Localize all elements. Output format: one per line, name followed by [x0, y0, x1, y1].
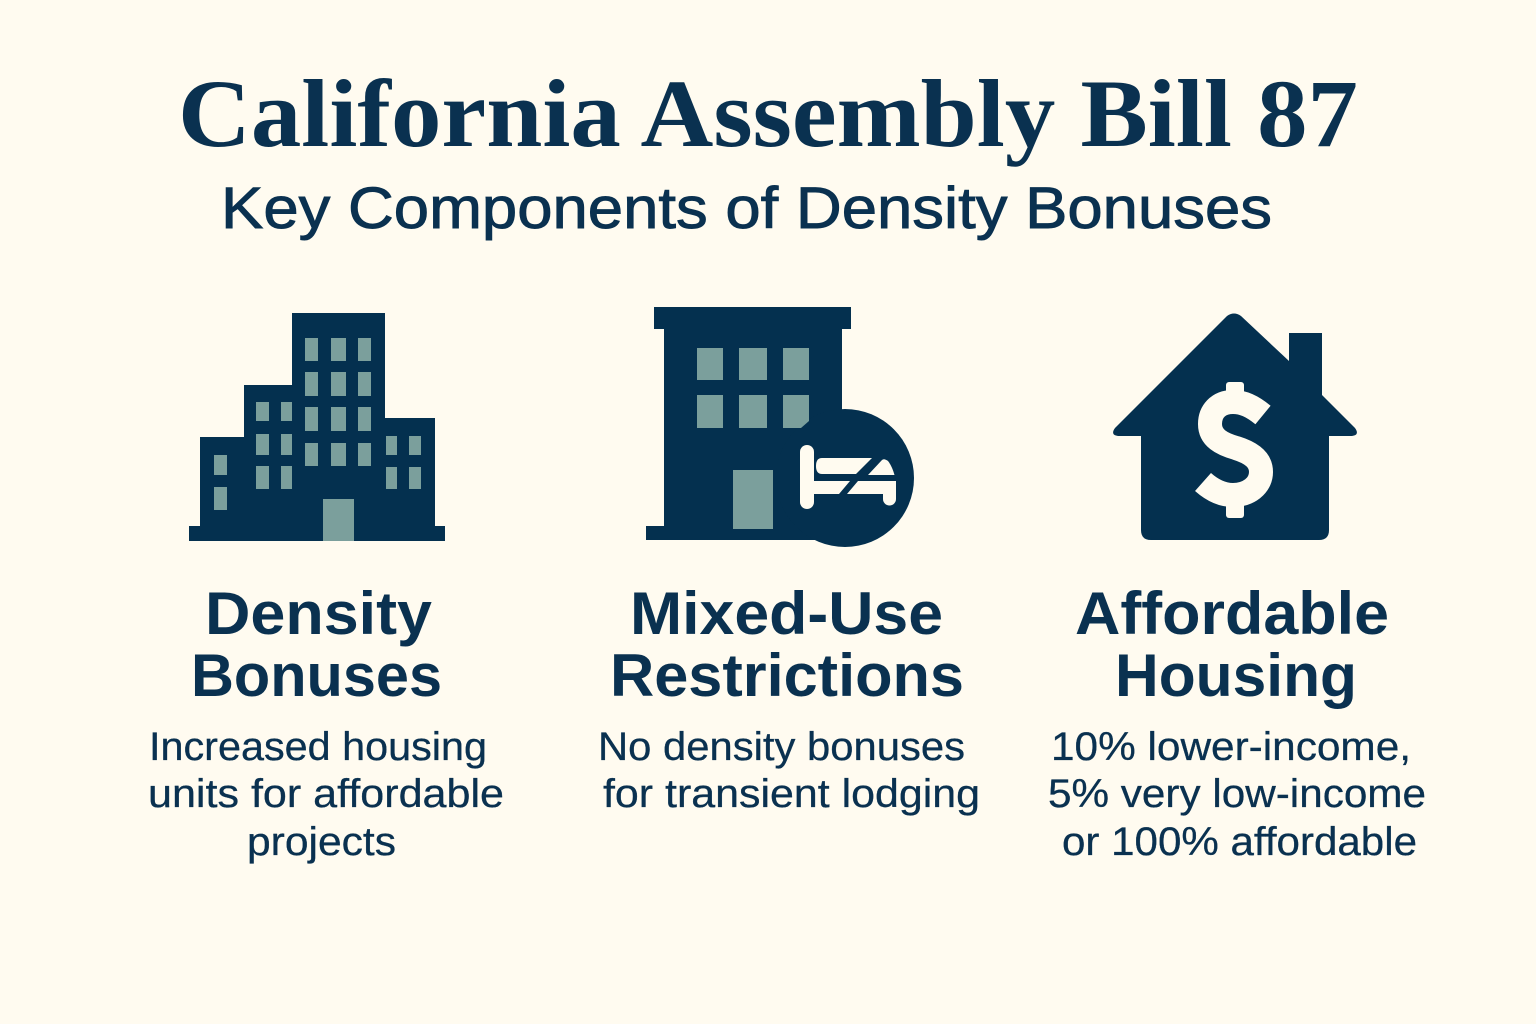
heading: affordable housing: Affordable	[1075, 580, 1389, 647]
text: density bonuses description: projects	[247, 820, 396, 864]
icon: house with dollar sign	[1113, 314, 1357, 540]
text: density bonuses description	[148, 725, 504, 864]
text: density bonuses description: units for affordable	[148, 772, 504, 816]
heading: affordable housing: Housing	[1115, 642, 1357, 709]
text: mixed-use description	[598, 725, 980, 816]
text: mixed-use description: for transient lodging	[603, 772, 980, 816]
text: mixed-use description: No density bonuses	[598, 725, 965, 769]
heading: mixed-use restrictions: Mixed-Use	[630, 580, 943, 647]
text: density bonuses description: Increased housing	[149, 725, 487, 769]
panel: mixed-use restrictions	[598, 307, 980, 816]
text: affordable housing description	[1048, 725, 1426, 864]
icon: apartment buildings	[189, 313, 445, 541]
heading: mixed-use restrictions: Restrictions	[610, 642, 964, 709]
heading: density bonuses: Density	[205, 580, 433, 647]
heading: affordable housing	[1075, 580, 1389, 709]
text: affordable housing description: 5% very low-income	[1048, 772, 1426, 816]
text: affordable housing description: or 100% affordable	[1062, 820, 1417, 864]
title: California Assembly Bill 87	[178, 60, 1358, 167]
icon: hotel with bed badge	[646, 307, 914, 547]
heading: mixed-use restrictions	[610, 580, 964, 709]
text: affordable housing description: 10% lower-income,	[1051, 725, 1411, 769]
heading: density bonuses	[191, 580, 442, 709]
heading: density bonuses: Bonuses	[191, 642, 442, 709]
subtitle: Key Components of Density Bonuses	[221, 176, 1272, 241]
panel: density bonuses	[148, 313, 504, 864]
panel: affordable housing	[1048, 314, 1426, 864]
